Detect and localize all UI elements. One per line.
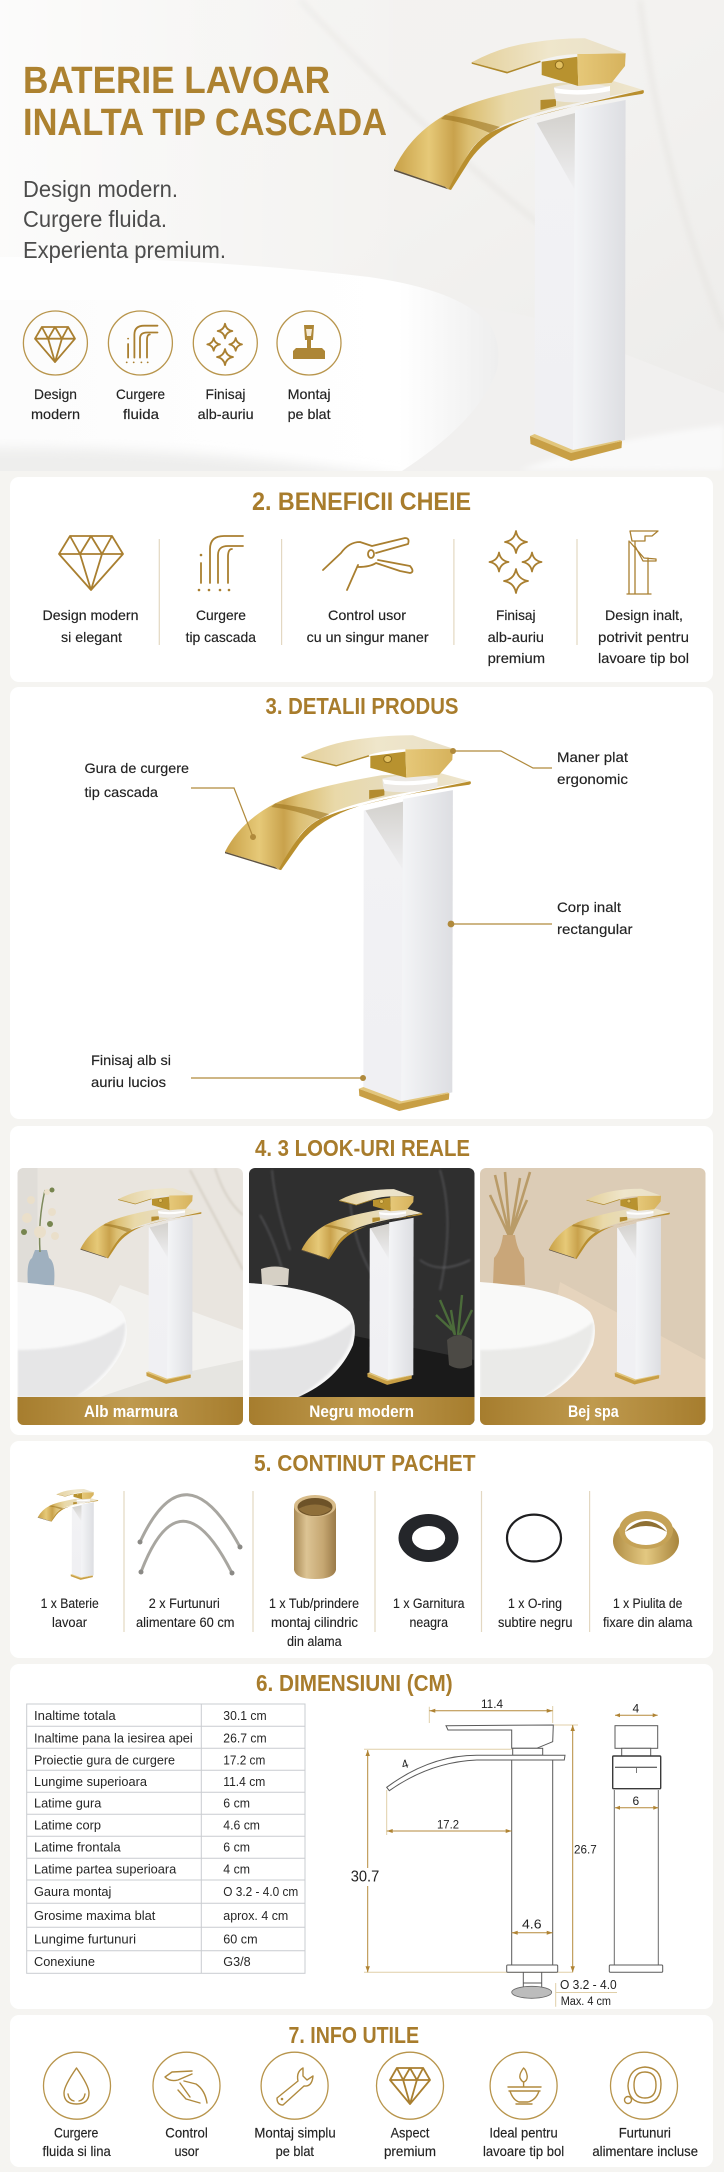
technical drawing: front view: O 3.2 - 4.0	[560, 1978, 617, 1992]
callout: corp inalt: Corp inalt	[557, 899, 621, 915]
dimensions table: Inaltime pana la iesirea apei	[34, 1731, 193, 1745]
benefit labels	[42, 607, 689, 666]
technical drawing: side view	[609, 1702, 663, 1972]
hero icon labels: fluida	[123, 406, 159, 422]
dimensions table: 4.6 cm	[223, 1819, 260, 1833]
dimensions table: 4 cm	[223, 1863, 250, 1877]
icon: wrench	[261, 2052, 328, 2119]
dimensions table: 26.7 cm	[223, 1731, 267, 1745]
icon: water flow	[198, 536, 243, 591]
dimensions table: Latime corp	[34, 1819, 101, 1833]
heading: 5. CONTINUT PACHET	[254, 1450, 476, 1476]
icon: sparkles	[490, 531, 542, 593]
benefit labels: cu un singur maner	[307, 629, 429, 645]
dimension values	[349, 1868, 381, 1886]
heading: 7. INFO UTILE	[288, 2022, 419, 2048]
icon: tall faucet	[627, 531, 658, 594]
package labels: neagra	[410, 1615, 448, 1630]
package labels: 1 x Piulita de	[613, 1596, 682, 1611]
dimensions table: Lungime superioara	[34, 1775, 147, 1789]
icon: diamond	[59, 536, 123, 590]
panel: continut pachet	[10, 1441, 713, 1658]
hero title	[23, 60, 387, 144]
technical drawing: front view: 4.6	[522, 1916, 542, 1931]
heading: 2. BENEFICII CHEIE	[252, 488, 471, 516]
benefit labels: Design modern	[42, 607, 138, 623]
technical drawing: front view: 30.7	[351, 1869, 379, 1886]
info labels: Curgere	[54, 2124, 98, 2140]
hero title: BATERIE LAVOAR	[23, 60, 330, 102]
benefit labels: premium	[488, 650, 545, 666]
info labels: alimentare incluse	[592, 2143, 698, 2159]
look: bej spa	[480, 1168, 706, 1425]
dimensions table: 17.2 cm	[223, 1753, 265, 1767]
hero photo background	[0, 0, 724, 490]
icon: hose	[610, 2052, 678, 2119]
hero icon labels: Curgere	[116, 386, 165, 402]
info labels: fluida si lina	[42, 2143, 111, 2159]
callout: maner plat: ergonomic	[557, 771, 628, 787]
hero tagline: Experienta premium.	[23, 237, 226, 263]
package labels	[41, 1596, 693, 1649]
package labels: din alama	[287, 1634, 342, 1649]
dimensions table: Latime partea superioara	[34, 1863, 176, 1877]
icon: curgere fluida	[108, 311, 172, 375]
package labels: fixare din alama	[603, 1615, 693, 1630]
callout: gura de curgere: Gura de curgere	[84, 760, 189, 776]
look label: Alb marmura	[84, 1402, 178, 1421]
benefit labels: si elegant	[61, 629, 122, 645]
dimensions table: 11.4 cm	[223, 1775, 265, 1789]
dimensions table: Proiectie gura de curgere	[34, 1753, 175, 1767]
technical drawing: front view: 4	[400, 1756, 411, 1772]
info labels: lavoare tip bol	[483, 2143, 564, 2159]
package labels: alimentare 60 cm	[136, 1615, 234, 1630]
callout: maner plat: Maner plat	[557, 749, 628, 765]
dimensions table: Grosime maxima blat	[34, 1909, 156, 1923]
dimensions table: 30.1 cm	[223, 1709, 267, 1723]
hero icon labels	[31, 386, 331, 422]
dimensions table: aprox. 4 cm	[223, 1909, 288, 1923]
dimensions table	[27, 1704, 305, 1973]
info labels: Control	[165, 2124, 208, 2140]
benefit labels: potrivit pentru	[598, 629, 689, 645]
benefit labels: tip cascada	[186, 629, 256, 645]
callout: finisaj: Finisaj alb si	[91, 1052, 171, 1068]
hero icon labels: modern	[31, 406, 80, 422]
package labels: 1 x Garnitura	[393, 1596, 465, 1611]
package labels: 1 x Baterie	[41, 1596, 99, 1611]
look label: Bej spa	[568, 1402, 619, 1421]
benefit labels: Control usor	[328, 607, 406, 623]
callout: finisaj	[91, 1052, 366, 1090]
technical drawing: front view: 11.4	[481, 1697, 503, 1711]
info labels	[42, 2124, 698, 2159]
panel: detalii produs	[10, 687, 713, 1119]
item: o-ring	[507, 1515, 561, 1561]
technical drawing: front view: 17.2	[437, 1817, 459, 1831]
dimension lines	[366, 1709, 575, 1972]
dimensions table: Conexiune	[34, 1955, 95, 1969]
callout: maner plat	[450, 748, 628, 787]
technical drawing: side view: 6	[632, 1794, 640, 1808]
panel: info utile	[10, 2015, 713, 2167]
info labels: premium	[384, 2143, 436, 2159]
dimensions table: O 3.2 - 4.0 cm	[223, 1885, 298, 1899]
item: faucet	[38, 1489, 98, 1580]
heading: 4. 3 LOOK-URI REALE	[255, 1135, 470, 1161]
dimensions table: 6 cm	[223, 1841, 250, 1855]
icon: montaj	[277, 311, 341, 375]
look label: Negru modern	[309, 1402, 414, 1421]
package labels: 1 x Tub/prindere	[269, 1596, 359, 1611]
product photo: faucet	[394, 38, 644, 461]
benefit labels: Finisaj	[496, 607, 536, 623]
item: gasket	[398, 1514, 458, 1562]
look: negru modern	[249, 1168, 474, 1425]
item: brass nut	[613, 1511, 679, 1565]
dimensions table: Lungime furtunuri	[34, 1932, 136, 1946]
package labels: subtire negru	[498, 1615, 572, 1630]
product photo: faucet	[225, 735, 471, 1111]
package dividers	[124, 1491, 590, 1632]
hero icon labels: pe blat	[288, 406, 331, 422]
callout: corp inalt: rectangular	[557, 921, 633, 937]
panel: beneficii cheie	[10, 477, 713, 682]
benefit labels: Curgere	[196, 607, 246, 623]
icon: drop	[44, 2052, 110, 2119]
icon: bowl	[490, 2052, 557, 2119]
icon: design modern	[23, 311, 87, 375]
callout: finisaj: auriu lucios	[91, 1074, 166, 1090]
heading: 6. DIMENSIUNI (CM)	[256, 1670, 453, 1696]
dimensions table: Gaura montaj	[34, 1885, 111, 1899]
dimensions table: Inaltime totala	[34, 1709, 116, 1723]
technical drawing: side view: 4	[632, 1702, 640, 1716]
hero icon labels: alb-auriu	[198, 406, 254, 422]
panel: dimensiuni	[10, 1664, 713, 2009]
icon: finisaj	[193, 311, 257, 375]
package labels: montaj cilindric	[271, 1615, 358, 1630]
technical drawing: front view: Max. 4 cm	[561, 1996, 611, 2008]
technical drawing: front view	[349, 1697, 617, 2008]
hero tagline: Design modern.	[23, 176, 178, 202]
package labels: 2 x Furtunuri	[149, 1596, 220, 1611]
dimensions table: 60 cm	[223, 1932, 258, 1946]
callout: gura de curgere	[84, 760, 256, 840]
icon: hand control	[153, 2052, 220, 2119]
technical drawing: front view: 26.7	[574, 1842, 597, 1856]
heading: 3. DETALII PRODUS	[266, 693, 458, 719]
panel: 3 look-uri reale	[10, 1126, 713, 1435]
hero icon labels: Montaj	[288, 386, 331, 402]
hero title: INALTA TIP CASCADA	[23, 102, 387, 144]
package labels: lavoar	[52, 1615, 87, 1630]
benefit labels: lavoare tip bol	[598, 650, 689, 666]
info labels: pe blat	[276, 2143, 314, 2159]
hero tagline	[23, 176, 226, 263]
info labels: usor	[174, 2143, 199, 2159]
benefit dividers	[159, 539, 577, 645]
benefit labels: Design inalt,	[605, 607, 683, 623]
item: brass tube	[294, 1495, 336, 1579]
info labels: Furtunuri	[619, 2124, 671, 2140]
side dimension lines	[615, 1713, 658, 1810]
dimensions table: 6 cm	[223, 1797, 250, 1811]
panel: hero	[0, 0, 724, 490]
look: alb marmura	[18, 1168, 243, 1425]
package labels: 1 x O-ring	[508, 1596, 562, 1611]
hero icon labels: Finisaj	[206, 386, 246, 402]
dimensions table: Latime frontala	[34, 1841, 121, 1855]
info labels: Montaj simplu	[254, 2124, 336, 2140]
info labels: Ideal pentru	[489, 2124, 558, 2140]
benefit labels: alb-auriu	[488, 629, 544, 645]
hero icon labels: Design	[34, 386, 77, 402]
callout: gura de curgere: tip cascada	[84, 784, 158, 800]
dimensions table: G3/8	[223, 1955, 251, 1969]
hero tagline: Curgere fluida.	[23, 206, 167, 232]
item: hoses	[138, 1495, 242, 1576]
icon: hand on lever	[323, 538, 412, 590]
icon: diamond	[376, 2052, 444, 2119]
info labels: Aspect	[391, 2124, 429, 2140]
callout: corp inalt	[448, 899, 633, 937]
dimensions table: Latime gura	[34, 1797, 101, 1811]
